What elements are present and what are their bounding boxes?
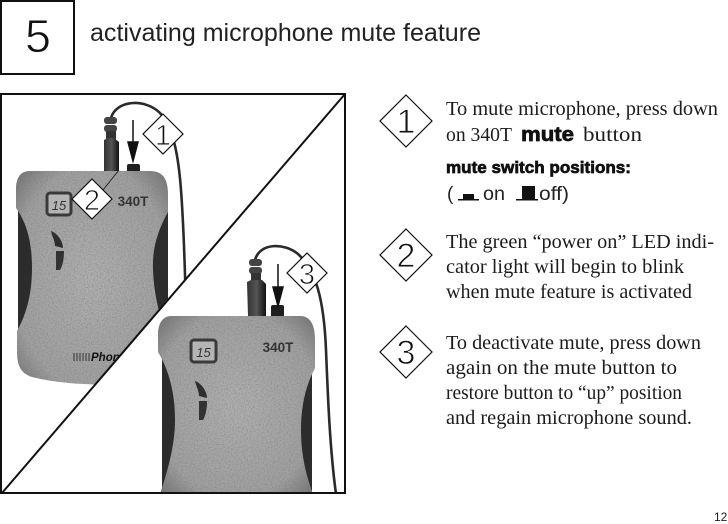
- callout 3 on photo: 3: [299, 259, 315, 291]
- step 1 badge: 1: [397, 103, 415, 141]
- step 2: [380, 229, 714, 303]
- photo: transmitter, mute on: Phonak: [91, 352, 133, 364]
- arrow 1: [128, 120, 138, 161]
- step 3 text: restore button to “up” position: [446, 382, 682, 404]
- mute switch legend: (: [447, 184, 454, 205]
- step 3 text: and regain microphone sound.: [446, 407, 692, 429]
- callout 2 on photo: 2: [84, 185, 100, 217]
- step 3 badge: [380, 326, 432, 378]
- panel: device photos: [1, 94, 345, 494]
- photo: transmitter, mute off: 15: [196, 345, 211, 360]
- section number box: [1, 1, 74, 74]
- callout 1 on photo: [143, 114, 183, 154]
- photo: transmitter, mute on: 340T: [118, 194, 149, 209]
- callout 1 on photo: 1: [155, 120, 171, 152]
- step 2 badge: [380, 229, 432, 281]
- step 1 text: mute: [521, 124, 574, 146]
- step 2 text: The green “power on” LED indi-: [446, 231, 714, 253]
- mute switch legend: on: [483, 184, 505, 205]
- mute switch legend: off): [539, 184, 569, 205]
- step 1 text: on 340T: [446, 124, 512, 146]
- step 3 badge: 3: [397, 334, 415, 372]
- leader line to LED: [103, 170, 119, 190]
- step 3 text: again on the mute button to: [446, 357, 677, 379]
- step 1: [380, 95, 718, 205]
- step 2 badge: 2: [397, 237, 415, 275]
- step 1 text: button: [583, 124, 642, 146]
- step 2 text: when mute feature is activated: [446, 281, 692, 303]
- mute switch legend: [447, 184, 569, 205]
- callout 3 on photo: [287, 253, 327, 293]
- photo: transmitter, mute off: [158, 246, 336, 494]
- icon: switch on: [458, 194, 479, 200]
- mute switch positions heading: mute switch positions:: [446, 158, 631, 177]
- page number: 12: [714, 510, 728, 524]
- step 2 text: cator light will begin to blink: [446, 256, 684, 278]
- step 1 text: To mute microphone, press down: [446, 98, 718, 120]
- section number box: 5: [25, 10, 51, 62]
- photo: transmitter, mute off: 340T: [263, 340, 294, 355]
- step 1 text: [446, 98, 718, 146]
- step 3: [380, 326, 701, 429]
- title: activating microphone mute feature: [90, 19, 481, 47]
- callout 2 on photo: [72, 179, 112, 219]
- step 1 badge: [380, 95, 432, 147]
- icon: switch off: [516, 186, 538, 200]
- arrow 3: [273, 264, 283, 306]
- step 3 text: To deactivate mute, press down: [446, 332, 701, 354]
- photo: transmitter, mute on: [16, 103, 186, 384]
- photo: transmitter, mute on: 15: [52, 198, 67, 213]
